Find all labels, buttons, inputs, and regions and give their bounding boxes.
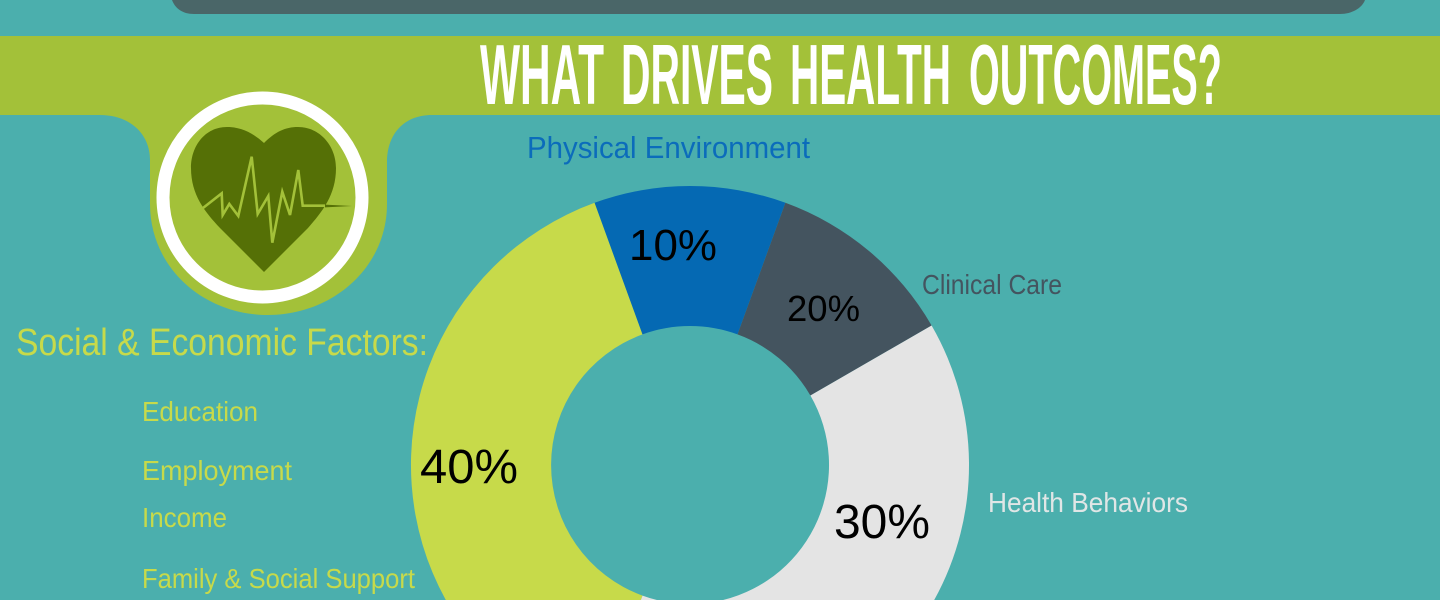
donut chart bbox=[411, 186, 969, 600]
icon ring bbox=[163, 98, 362, 297]
segment: health behaviors bbox=[641, 326, 969, 600]
pulse line bbox=[203, 157, 325, 243]
title: HEALTH bbox=[790, 28, 951, 123]
icon: heart with pulse bbox=[163, 98, 362, 297]
title bbox=[480, 28, 1222, 123]
factor: income: Income bbox=[142, 502, 227, 533]
segment: physical environment bbox=[595, 186, 785, 334]
title: DRIVES bbox=[621, 28, 773, 123]
factor: education: Education bbox=[142, 396, 258, 427]
value: 10%: 10% bbox=[629, 221, 717, 270]
label: health behaviors: Health Behaviors bbox=[988, 487, 1188, 518]
factor: family and social support: Family & Social Support bbox=[142, 563, 415, 594]
value: 40%: 40% bbox=[420, 441, 518, 494]
value: 20%: 20% bbox=[787, 288, 860, 329]
green banner with drop holding the icon bbox=[0, 36, 1440, 315]
heading: social and economic factors: Social & Economic Factors: bbox=[16, 322, 428, 364]
label: clinical care: Clinical Care bbox=[922, 269, 1062, 300]
top dark bar bbox=[172, 0, 1365, 14]
segment: social and economic factors bbox=[411, 203, 642, 600]
pulse tail bbox=[325, 205, 352, 207]
factor list bbox=[142, 396, 415, 594]
factor: employment: Employment bbox=[142, 455, 292, 486]
label: physical environment: Physical Environment bbox=[527, 130, 810, 165]
segment: clinical care bbox=[738, 203, 932, 396]
heart shape bbox=[191, 127, 336, 272]
value: 30%: 30% bbox=[834, 496, 930, 549]
title: WHAT bbox=[480, 28, 604, 123]
